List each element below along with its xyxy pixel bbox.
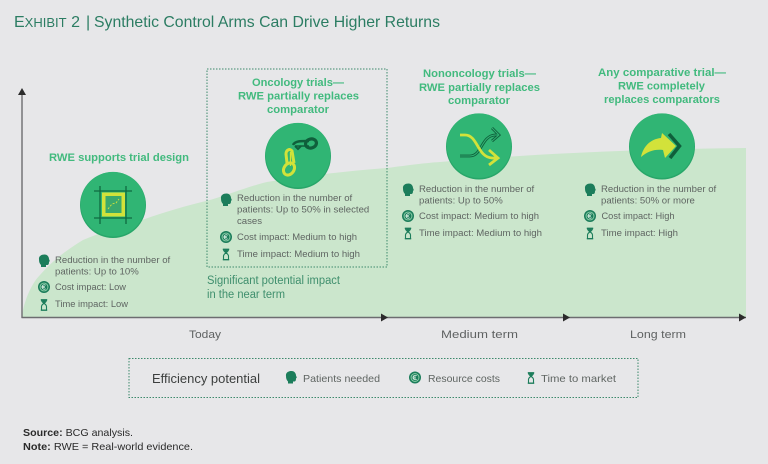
text: cost impact: Cost impact: Low xyxy=(55,282,126,293)
icon: patients head xyxy=(221,194,232,206)
text: patients reduction: patients: Up to 10% xyxy=(55,266,139,278)
title: Synthetic Control Arms Can Drive Higher Returns xyxy=(94,14,440,31)
icon: patients head xyxy=(585,184,596,196)
heading: Any comparative trial: replaces comparators xyxy=(604,94,720,106)
icon: cost coin xyxy=(220,231,232,243)
legend icon: time xyxy=(528,373,534,383)
text: patients reduction: Reduction in the number of xyxy=(601,184,717,195)
title: EXHIBIT 2 xyxy=(14,14,80,31)
icon: hourglass xyxy=(587,228,593,239)
legend title: Efficiency potential xyxy=(152,372,260,386)
y axis arrow xyxy=(18,88,26,318)
icon: patients head xyxy=(403,184,414,196)
icon: cost coin xyxy=(402,210,414,222)
text: patients reduction: patients: Up to 50% in selected xyxy=(237,204,369,216)
footnote: source and note: Note: RWE = Real-world evidence. xyxy=(23,441,193,453)
icon: broken chain xyxy=(265,123,331,189)
callout: near-term impact: Significant potential impact xyxy=(207,275,341,287)
icon: target frame with chart xyxy=(80,172,146,238)
x axis timeline arrows xyxy=(22,314,746,322)
heading: Any comparative trial: RWE completely xyxy=(618,80,706,92)
heading: Oncology trials: comparator xyxy=(267,104,330,116)
icon: hourglass xyxy=(223,249,229,260)
icon: crossing arrows xyxy=(446,113,512,180)
icon: hourglass xyxy=(41,300,47,310)
legend label: time to market: Time to market xyxy=(541,373,616,385)
heading: RWE supports trial design: RWE supports trial design xyxy=(49,152,189,164)
chart: efficiency potential curve xyxy=(22,148,746,317)
legend xyxy=(129,358,638,398)
panel: Nononcology trials xyxy=(402,68,542,239)
title: | xyxy=(86,14,90,31)
dotted highlight box xyxy=(207,69,387,267)
footnote: source and note: Source: BCG analysis. xyxy=(23,427,133,439)
text: patients reduction: patients: 50% or more xyxy=(601,196,695,206)
icon: forward arrow xyxy=(629,113,695,180)
legend label: patients needed: Patients needed xyxy=(303,373,380,385)
text: time impact: Time impact: Medium to high xyxy=(237,249,360,260)
text: patients reduction: cases xyxy=(237,216,262,227)
heading: Nononcology trials: Nononcology trials— xyxy=(423,68,536,80)
text: cost impact: Cost impact: Medium to high xyxy=(237,232,357,243)
icon: patients head xyxy=(39,254,50,267)
text: time impact: Time impact: Low xyxy=(55,299,128,310)
legend icon: costs xyxy=(409,372,421,384)
text: time impact: Time impact: Medium to high xyxy=(419,228,542,239)
heading: Nononcology trials: comparator xyxy=(448,95,511,107)
text: time impact: Time impact: High xyxy=(601,228,678,239)
legend label: resource costs: Resource costs xyxy=(428,373,500,385)
timeline label: Today: Today xyxy=(189,329,222,341)
icon: cost coin xyxy=(38,281,50,293)
heading: Oncology trials: RWE partially replaces xyxy=(238,90,359,102)
panel: RWE supports trial design xyxy=(38,152,189,310)
text: cost impact: Cost impact: Medium to high xyxy=(419,211,539,222)
heading: Any comparative trial: Any comparative trial— xyxy=(598,67,726,79)
timeline label: Medium term: Medium term xyxy=(441,329,518,341)
footnote: source and note xyxy=(23,427,193,453)
panel: Any comparative trial xyxy=(584,67,726,239)
icon: cost coin xyxy=(584,210,596,222)
heading: Oncology trials: Oncology trials— xyxy=(252,77,344,89)
panel: Oncology trials xyxy=(207,69,387,267)
heading: Nononcology trials: RWE partially replaces xyxy=(419,82,540,94)
icon: hourglass xyxy=(405,228,411,239)
text: patients reduction: patients: Up to 50% xyxy=(419,196,503,206)
legend icon: patients xyxy=(286,371,297,384)
text: patients reduction: Reduction in the number of xyxy=(237,193,353,204)
callout: near-term impact: in the near term xyxy=(207,289,285,301)
text: patients reduction: Reduction in the number of xyxy=(419,184,535,195)
text: patients reduction: Reduction in the number of xyxy=(55,255,171,266)
text: cost impact: Cost impact: High xyxy=(602,211,674,222)
timeline label: Long term: Long term xyxy=(630,329,686,341)
